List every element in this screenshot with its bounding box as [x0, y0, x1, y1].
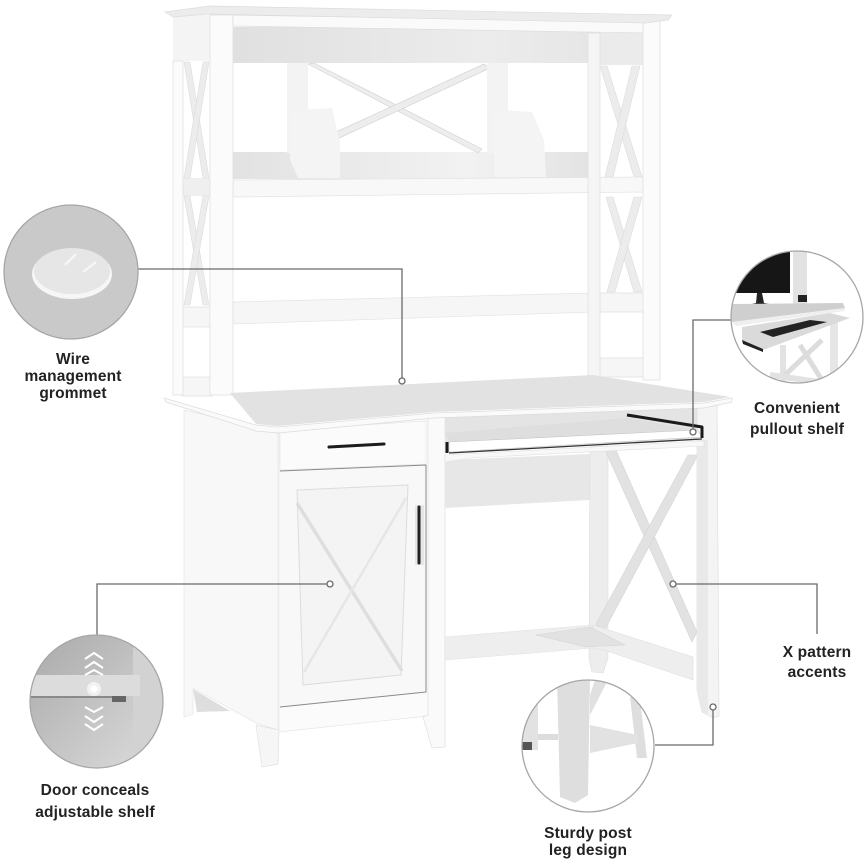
- label: Wire: [56, 351, 90, 368]
- under-shelf back panel: [445, 454, 590, 508]
- cabinet toe gap: [193, 689, 230, 712]
- crown rail: [233, 15, 643, 33]
- door: [280, 465, 426, 708]
- door marker: [327, 581, 333, 587]
- inset circle: adjustable shelf: [28, 633, 167, 771]
- corner shelf: [536, 627, 625, 647]
- drawer handle: [329, 444, 384, 447]
- X pattern line: [676, 584, 817, 634]
- label: X pattern accents: X pattern: [783, 644, 851, 661]
- label: X pattern accents: accents: [788, 664, 846, 681]
- hutch side X braces: [184, 62, 642, 305]
- shelf support rail: [445, 441, 704, 462]
- drawer and door frame: [279, 418, 428, 732]
- hutch side rails: [182, 293, 644, 396]
- leg line: [655, 710, 713, 745]
- front leg: [256, 725, 279, 767]
- hutch side top panels: [173, 15, 643, 196]
- upper shelf: [233, 177, 643, 197]
- leg marker: [710, 704, 716, 710]
- lower side rail: [593, 625, 693, 680]
- rear leg: [589, 440, 608, 673]
- lower back rail: [445, 625, 593, 660]
- label: Door conceals: [41, 782, 149, 799]
- keyboard opening back: [445, 405, 703, 452]
- label: Convenient: [754, 400, 840, 417]
- circle outline: [4, 205, 138, 339]
- label: adjustable shelf: [35, 804, 155, 821]
- pullout marker: [690, 429, 696, 435]
- label: leg design: [549, 842, 627, 859]
- desktop: [164, 375, 732, 433]
- callout: post leg: [520, 678, 656, 859]
- label: pullout shelf: [750, 421, 845, 438]
- drawer: [280, 421, 426, 470]
- pullout shelf: [445, 415, 702, 453]
- inset circle: pullout shelf: [732, 252, 850, 382]
- X marker: [670, 581, 676, 587]
- label: management: [24, 368, 122, 385]
- hutch posts: [173, 15, 660, 395]
- grommet marker: [399, 378, 405, 384]
- hutch back panels: [233, 27, 593, 179]
- right front leg: [697, 403, 719, 718]
- crown top: [165, 6, 672, 23]
- circle outline: [522, 680, 654, 812]
- circle outline: [30, 635, 163, 768]
- book dividers: [290, 108, 546, 178]
- cabinet side panel: [184, 410, 278, 730]
- grommet line: [137, 269, 402, 378]
- hutch: [165, 6, 672, 396]
- inset circle: grommet: [0, 200, 140, 340]
- callout: adjustable shelf: [28, 633, 167, 821]
- circle outline: [731, 251, 863, 383]
- side X pattern: [596, 448, 698, 642]
- callout lines: [97, 269, 817, 745]
- door handle: [415, 505, 424, 565]
- desk: [164, 375, 732, 767]
- label: Sturdy post: [544, 825, 632, 842]
- door line: [97, 584, 327, 635]
- center post: [423, 417, 445, 748]
- inset circle: post leg: [522, 680, 647, 803]
- lower shelf: [233, 293, 593, 324]
- pullout line: [693, 320, 731, 429]
- back uprights: [287, 63, 508, 153]
- callout: pullout shelf: [728, 250, 864, 438]
- back X brace: [308, 63, 490, 153]
- callout: wire management grommet: [0, 200, 140, 402]
- label: grommet: [39, 385, 107, 402]
